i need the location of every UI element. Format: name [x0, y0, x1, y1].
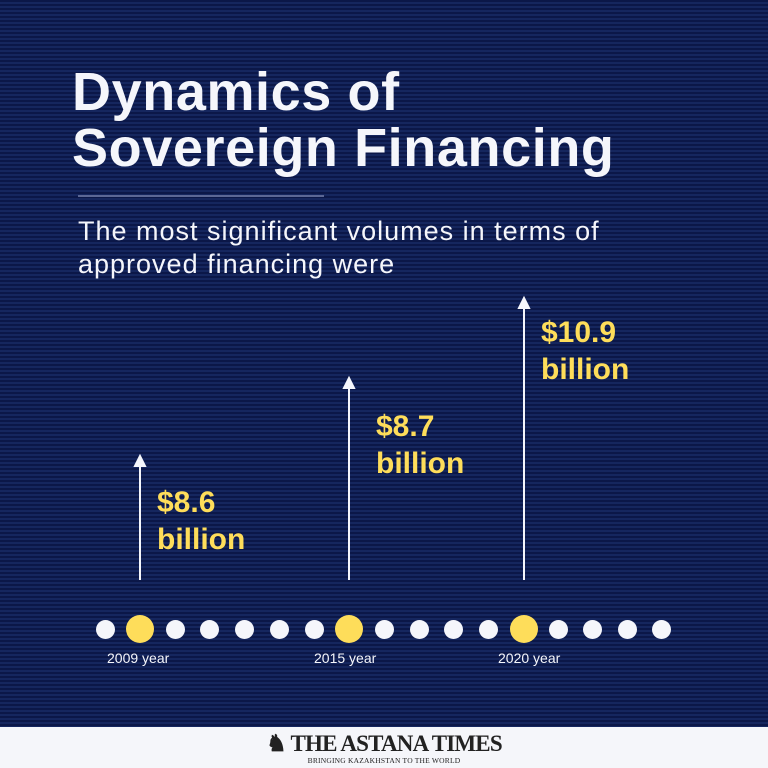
value 2009: $8.6 [157, 486, 215, 519]
footer: ♞ THE ASTANA TIMES [266, 731, 502, 756]
value 2020 [541, 316, 629, 386]
subtitle: approved financing were [78, 249, 395, 279]
value 2009: billion [157, 523, 245, 556]
subtitle [78, 216, 600, 279]
title: Sovereign Financing [72, 118, 614, 178]
timeline dots: 2020 year [498, 650, 560, 666]
footer: BRINGING KAZAKHSTAN TO THE WORLD [308, 756, 460, 765]
title [72, 62, 614, 178]
value 2015: $8.7 [376, 410, 434, 443]
timeline dots: 2015 year [314, 650, 376, 666]
footer [0, 727, 768, 768]
value 2015 [376, 410, 464, 480]
value 2015: billion [376, 447, 464, 480]
value 2020: $10.9 [541, 316, 616, 349]
value 2009 [157, 486, 245, 556]
timeline dots: 2009 year [107, 650, 169, 666]
value 2020: billion [541, 353, 629, 386]
title: Dynamics of [72, 62, 400, 122]
subtitle: The most significant volumes in terms of [78, 216, 600, 246]
